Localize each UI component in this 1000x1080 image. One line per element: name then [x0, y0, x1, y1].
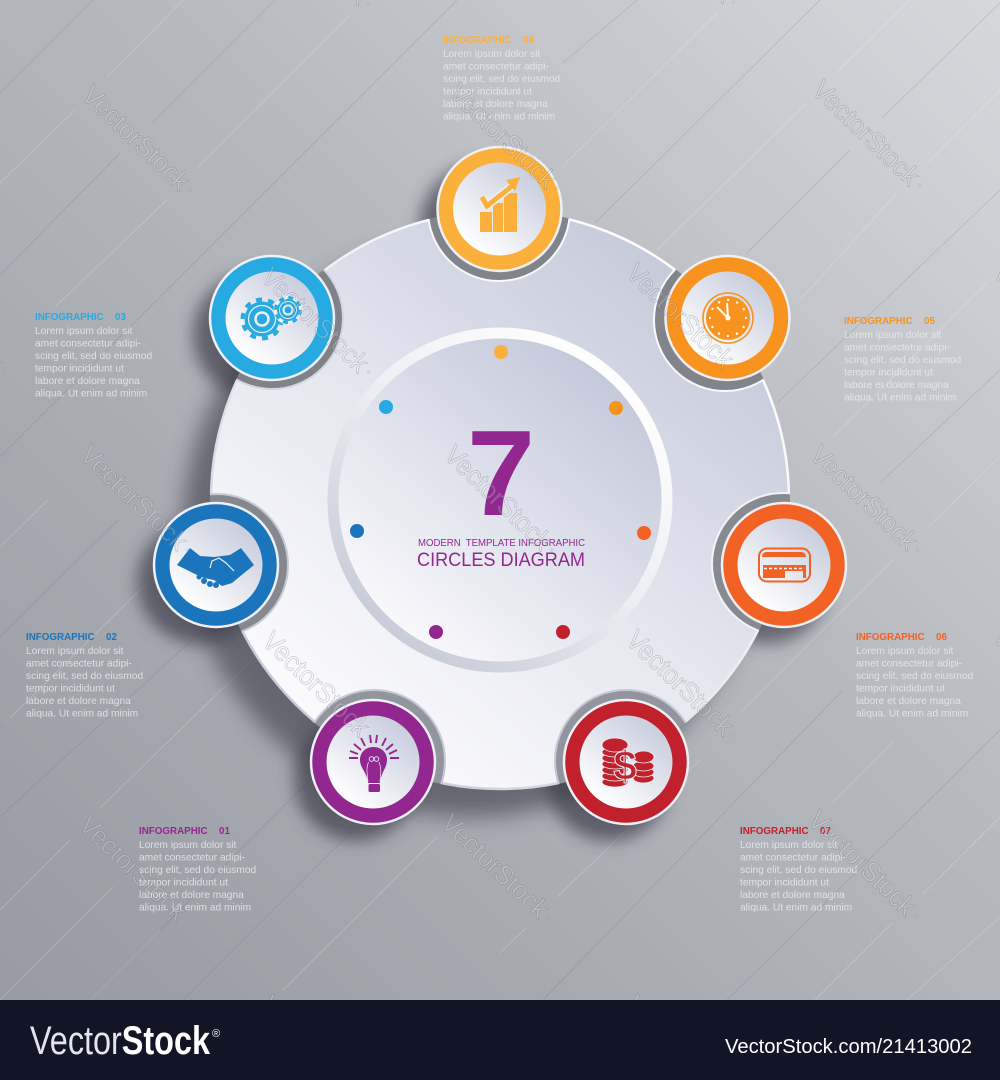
icon: handshake [177, 548, 254, 588]
watermarks: ® [553, 185, 560, 192]
watermarks: VectorStock [73, 810, 193, 927]
icon: light bulb [349, 735, 399, 792]
text block 07: INFOGRAPHIC [740, 826, 809, 837]
text block 03 [35, 312, 153, 400]
text block 02: tempor incididunt ut [26, 684, 115, 694]
watermarks: VectorStock [74, 440, 194, 557]
text block 04 [443, 35, 561, 122]
text block 04: 04 [523, 35, 534, 46]
text block 01: 01 [219, 826, 230, 837]
text block 05: 05 [924, 316, 935, 327]
icon: credit card [759, 548, 810, 582]
text block 03: INFOGRAPHIC [35, 312, 104, 323]
watermarks: VectorStock [620, 258, 740, 375]
text block 06: Lorem ipsum dolor sit [856, 646, 954, 657]
footer url: VectorStock.com/21413002 [725, 1036, 972, 1058]
watermarks: ® [365, 1, 372, 8]
center number: 7 [467, 405, 535, 541]
text block 07: tempor incididunt ut [740, 878, 829, 888]
text block 04: Lorem ipsum dolor sit [443, 49, 541, 60]
watermarks: VectorStock [255, 262, 375, 379]
text block 07: scing elit, sed do eiusmod [740, 865, 858, 876]
text block 06: amet consectetur adipi- [856, 658, 962, 670]
text block 07 [740, 826, 858, 914]
text block 04: amet consectetur adipi- [443, 62, 549, 72]
text block 06: aliqua. Ut enim ad minim [856, 708, 968, 720]
watermarks: VectorStock [443, 78, 563, 195]
watermarks: VectorStock [438, 440, 558, 557]
badge 06: card [722, 503, 846, 627]
text block 03: aliqua. Ut enim ad minim [35, 388, 147, 400]
text block 05: tempor incididunt ut [844, 368, 933, 378]
text block 04: tempor incididunt ut [443, 86, 532, 98]
text block 05: INFOGRAPHIC [844, 316, 913, 327]
watermarks: ® [548, 547, 555, 554]
text block 03: 03 [115, 312, 126, 323]
text block 03: amet consectetur adipi- [35, 338, 141, 350]
dots around center [350, 345, 651, 639]
icon: growth chart [480, 177, 520, 232]
text block 05: amet consectetur adipi- [844, 342, 950, 354]
badge 03: gears [210, 256, 334, 380]
text block 02: amet consectetur adipi- [26, 658, 132, 670]
text block 04: aliqua. Ut enim ad minim [443, 112, 555, 122]
watermarks: ® [912, 912, 919, 919]
text block 01: scing elit, sed do eiusmod [139, 865, 257, 876]
text block 03: tempor incididunt ut [35, 364, 124, 374]
watermarks: VectorStock [435, 808, 555, 925]
footer logo: VectorStock [30, 1019, 211, 1063]
text block 01: labore et dolore magna [139, 890, 244, 901]
watermarks: ® [366, 733, 373, 740]
center ring and disc [333, 333, 667, 667]
text block 02: aliqua. Ut enim ad minim [26, 708, 138, 720]
text block 02: scing elit, sed do eiusmod [26, 671, 144, 682]
text block 02: Lorem ipsum dolor sit [26, 646, 124, 657]
watermarks: ® [183, 917, 190, 924]
footer registered mark: ® [212, 1028, 220, 1040]
text block 05: labore et dolore magna [844, 380, 949, 391]
text block 05: aliqua. Ut enim ad minim [844, 392, 956, 404]
watermarks: ® [730, 365, 737, 372]
text block 07: aliqua. Ut enim ad minim [740, 902, 852, 914]
watermarks: VectorStock [806, 75, 926, 192]
text block 07: labore et dolore magna [740, 890, 845, 901]
center subtitle: MODERN TEMPLATE INFOGRAPHIC [418, 537, 585, 549]
watermarks: VectorStock [256, 626, 376, 743]
text block 07: 07 [820, 826, 831, 837]
watermarks: ® [916, 182, 923, 189]
watermarks: VectorStock [804, 440, 924, 557]
text block 04: scing elit, sed do eiusmod [443, 74, 561, 85]
text block 06: tempor incididunt ut [856, 684, 945, 694]
footer bar [0, 1000, 1000, 1080]
text block 05 [844, 316, 962, 404]
text block 07: amet consectetur adipi- [740, 852, 846, 864]
text block 07: Lorem ipsum dolor sit [740, 840, 838, 851]
watermarks: ® [730, 732, 737, 739]
text block 03: Lorem ipsum dolor sit [35, 326, 133, 337]
badge 02: handshake [154, 503, 278, 627]
badge 01: bulb [311, 700, 435, 824]
watermarks: ® [545, 915, 552, 922]
text block 02: INFOGRAPHIC [26, 632, 95, 643]
text block 06: labore et dolore magna [856, 696, 961, 707]
text block 06: scing elit, sed do eiusmod [856, 671, 974, 682]
icon: coin stacks: $ [613, 742, 637, 789]
text block 05: scing elit, sed do eiusmod [844, 355, 962, 366]
text block 05: Lorem ipsum dolor sit [844, 330, 942, 341]
text block 02 [26, 632, 144, 720]
text block 01 [139, 826, 257, 914]
text block 02: 02 [106, 632, 117, 643]
text block 06: INFOGRAPHIC [856, 632, 925, 643]
text block 06 [856, 632, 974, 720]
badge 04: chart [438, 147, 562, 271]
badge 05: clock [666, 256, 790, 380]
text block 01: tempor incididunt ut [139, 878, 228, 888]
text block 02: labore et dolore magna [26, 696, 131, 707]
watermarks: ® [184, 547, 191, 554]
watermarks: VectorStock [802, 805, 922, 922]
text block 03: scing elit, sed do eiusmod [35, 351, 153, 362]
watermarks: ® [186, 187, 193, 194]
text block 06: 06 [936, 632, 947, 643]
text block 03: labore et dolore magna [35, 376, 140, 387]
center title: CIRCLES DIAGRAM [417, 549, 585, 571]
text block 01: Lorem ipsum dolor sit [139, 840, 237, 851]
watermarks: ® [914, 547, 921, 554]
text block 04: labore et dolore magna [443, 99, 548, 110]
icon: clock [703, 293, 753, 343]
main disk with notches [210, 217, 790, 790]
text block 01: INFOGRAPHIC [139, 826, 208, 837]
watermarks: ® [365, 369, 372, 376]
text block 04: INFOGRAPHIC [443, 35, 512, 46]
watermarks: VectorStock [76, 80, 196, 197]
badge 07: coins [564, 700, 688, 824]
soft shadows [137, 164, 829, 841]
icon: gears [242, 296, 302, 338]
text block 01: aliqua. Ut enim ad minim [139, 902, 251, 914]
watermarks: VectorStock [620, 625, 740, 742]
text block 01: amet consectetur adipi- [139, 852, 245, 864]
